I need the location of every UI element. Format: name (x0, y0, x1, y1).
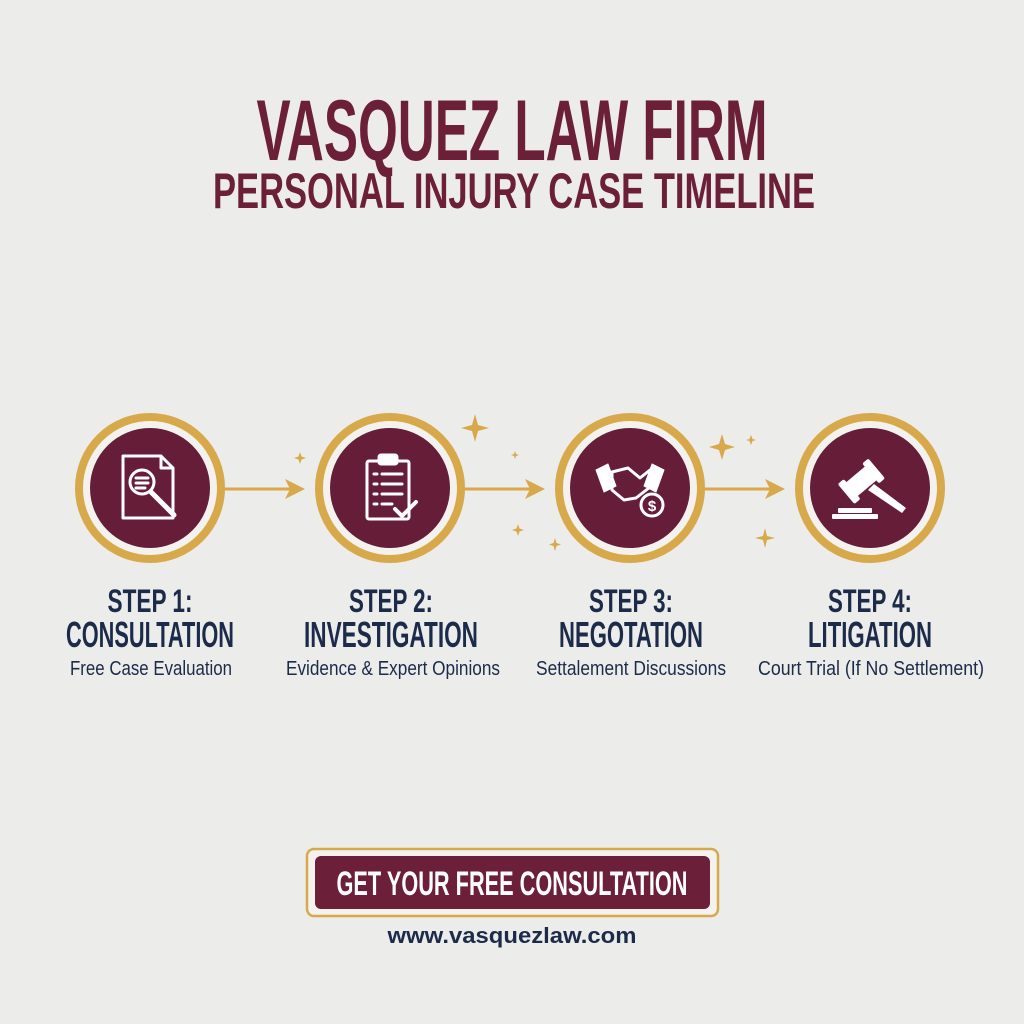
step 4 label (758, 583, 984, 680)
step 2 (286, 417, 500, 680)
step 4 label: STEP 4: (828, 583, 912, 619)
step 2 label (286, 583, 500, 680)
step 3 label: Settalement Discussions (536, 658, 726, 680)
icon circle 1 (79, 417, 221, 559)
step 1 label: STEP 1: (108, 583, 192, 619)
step 4 (758, 417, 984, 680)
icon: handshake with dollar (596, 464, 664, 516)
icon: clipboard check (367, 455, 416, 519)
step 4 label: Court Trial (If No Settlement) (758, 658, 984, 680)
step 1 label: CONSULTATION (66, 614, 234, 655)
cta button: GET YOUR FREE CONSULTATION (336, 865, 688, 903)
arrow 1 (225, 479, 305, 499)
step 2 label: Evidence & Expert Opinions (286, 658, 500, 680)
step 3 (536, 417, 726, 680)
step 3 label: NEGOTATION (559, 614, 703, 655)
step 2 label: INVESTIGATION (304, 614, 478, 655)
step 4 label: LITIGATION (808, 614, 932, 655)
sparkles (294, 414, 775, 551)
icon: gavel (832, 458, 906, 519)
icon circle 4 (799, 417, 941, 559)
icon: handshake with dollar: $ (648, 498, 657, 515)
arrow 2 (465, 479, 545, 499)
step 2 label: STEP 2: (349, 583, 433, 619)
cta button (307, 849, 718, 916)
step 1 label: Free Case Evaluation (70, 658, 232, 680)
step 1 label (66, 583, 234, 680)
icon circle 2 (319, 417, 461, 559)
icon: document magnifier (123, 456, 174, 518)
arrow 3 (705, 479, 785, 499)
step 3 label: STEP 3: (589, 583, 673, 619)
step 1 (66, 417, 234, 680)
icon circle 3 (559, 417, 701, 559)
step 3 label (536, 583, 726, 680)
website url: www.vasquezlaw.com (386, 923, 636, 948)
